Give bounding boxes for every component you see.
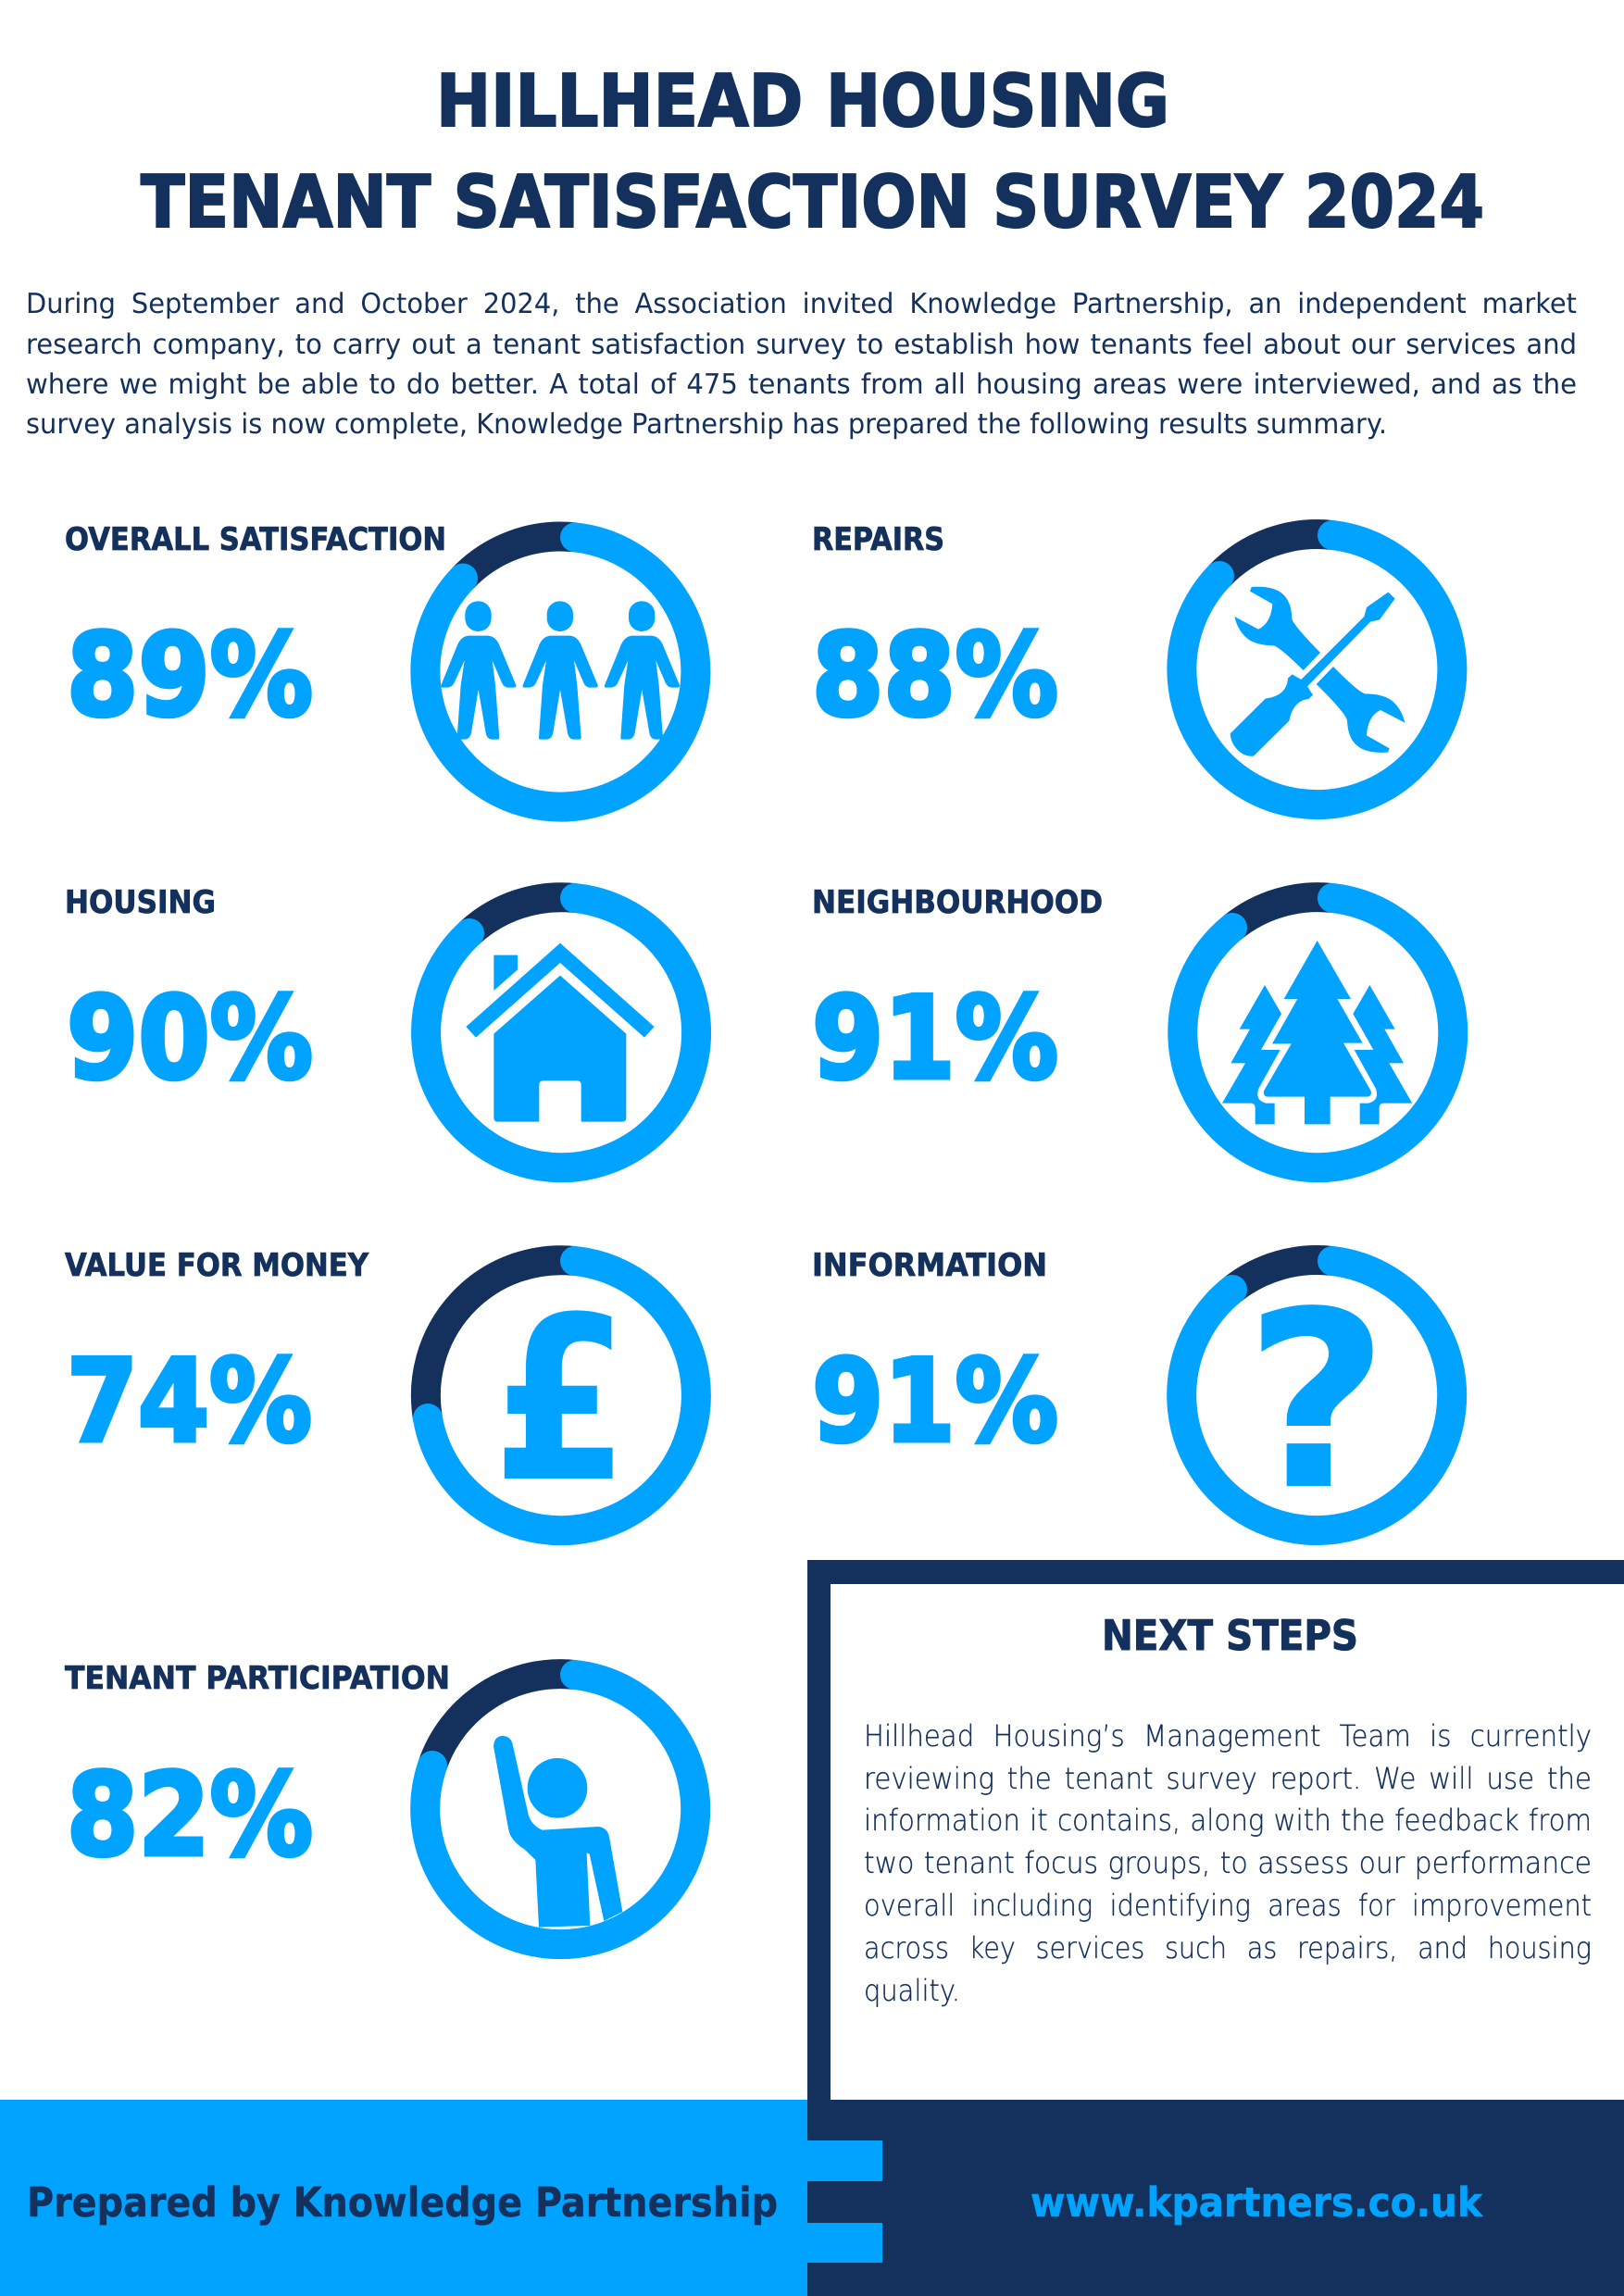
title — [141, 60, 1484, 244]
label: housing: HOUSING — [65, 884, 216, 921]
panel: tenant participation — [65, 1660, 695, 1944]
label: neighbourhood: NEIGHBOURHOOD — [812, 884, 1103, 921]
panel: next steps — [807, 1560, 1624, 2100]
figure: 90%: 90% — [67, 973, 313, 1105]
label: tenant participation: TENANT PARTICIPATION — [65, 1660, 450, 1697]
panel: overall satisfaction — [65, 521, 695, 807]
ring: 90% — [426, 897, 696, 1167]
label: repairs: REPAIRS — [812, 521, 944, 558]
figure: 89%: 89% — [67, 610, 313, 742]
figure: 88%: 88% — [812, 610, 1058, 742]
figure: 74%: 74% — [67, 1336, 312, 1468]
next steps body text: two tenant focus groups, to assess our performance — [864, 1845, 1592, 1880]
ring: 88% — [1181, 534, 1452, 805]
ring: 82% — [425, 1674, 695, 1944]
icon: trees — [1222, 941, 1412, 1124]
intro paragraph: research company, to carry out a tenant satisfaction survey to establish how tenants feel about our services and — [26, 329, 1577, 361]
title: TENANT SATISFACTION SURVEY 2024 — [141, 161, 1484, 244]
footer text: website: www.kpartners.co.uk — [1031, 2179, 1484, 2227]
ring: 91% — [1181, 1260, 1452, 1530]
panel: value for money — [65, 1247, 696, 1531]
panel: neighbourhood — [812, 884, 1453, 1167]
heading: next steps: NEXT STEPS — [1102, 1611, 1358, 1660]
icon: pound sign: £ — [493, 1270, 628, 1531]
icon: three people — [441, 601, 680, 740]
footer text: prepared by: Prepared by Knowledge Partnership — [27, 2179, 778, 2227]
panel: housing — [65, 884, 696, 1167]
intro paragraph — [26, 288, 1577, 441]
intro paragraph: During September and October 2024, the Association invited Knowledge Partnership, an independent market — [26, 288, 1577, 320]
label: overall satisfaction: OVERALL SATISFACTION — [65, 521, 446, 558]
title: HILLHEAD HOUSING — [436, 60, 1169, 144]
icon: person raising hand — [493, 1736, 622, 1928]
next steps body text: quality. — [864, 1973, 960, 2008]
icon: house — [466, 943, 655, 1122]
intro paragraph: where we might be able to do better. A total of 475 tenants from all housing areas were interviewed, and as the — [26, 368, 1577, 401]
label: information: INFORMATION — [812, 1247, 1047, 1284]
footer right: dark band with tabs — [807, 2100, 1624, 2296]
next steps frame — [807, 1560, 1624, 2100]
footer left: light blue band — [0, 2100, 807, 2296]
icon: spanner and screwdriver — [1230, 587, 1405, 756]
ring: 91% — [1182, 897, 1453, 1167]
icon: question mark: ? — [1244, 1260, 1389, 1544]
panel: repairs — [812, 521, 1452, 805]
figure: 82%: 82% — [67, 1750, 313, 1882]
panel: information — [812, 1247, 1452, 1544]
figure: 91%: 91% — [812, 973, 1058, 1105]
next steps body text — [864, 1718, 1592, 2008]
ring: 89% — [425, 537, 695, 807]
figure: 91%: 91% — [812, 1336, 1058, 1468]
intro paragraph: survey analysis is now complete, Knowledge Partnership has prepared the following results summary. — [26, 408, 1387, 441]
label: value for money: VALUE FOR MONEY — [65, 1247, 369, 1284]
ring: 74% — [426, 1260, 696, 1530]
